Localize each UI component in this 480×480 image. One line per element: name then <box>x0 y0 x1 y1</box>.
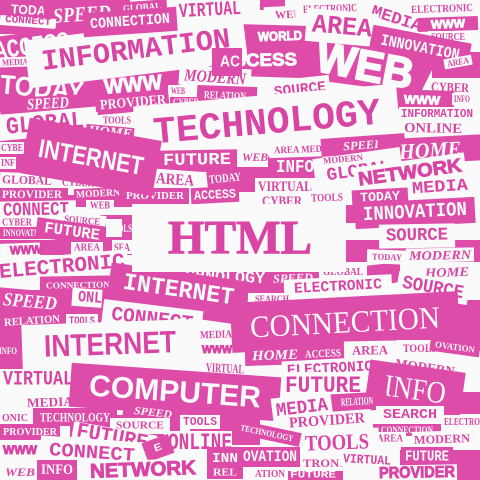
word tag: www right <box>418 16 478 32</box>
band: access and world <box>190 24 436 94</box>
word tag: connection large: CONNECTION <box>249 300 441 344</box>
word tag: future bottom: FUTURE <box>75 420 149 456</box>
word tag: tool lower: TOOLS <box>403 341 437 355</box>
word tag: inn bottom <box>207 447 243 479</box>
word tag: online <box>71 288 103 308</box>
word tag: innovation left <box>0 227 50 239</box>
word tag: web lower left: WEB <box>90 200 110 212</box>
word tag: www lower: WWW <box>202 344 233 356</box>
word tag: access middle: ACCESS <box>194 186 237 204</box>
word tag: connection top: CONNECTION <box>90 11 170 33</box>
word tag: electronic top: ELECTRONIC <box>303 2 357 16</box>
word tag: today large: TODAY <box>0 69 85 107</box>
word tag: technology: TECHNOLOGY <box>152 93 383 155</box>
word tag: info right: INFO <box>454 94 470 104</box>
word tag: ovation right: OVATION <box>434 339 476 355</box>
word tag: small pink slab: E <box>152 441 164 455</box>
word tag: media right <box>399 175 480 201</box>
word tag: web top: WEB <box>275 8 302 22</box>
word tag: global right middle: GLOBAL <box>325 158 392 186</box>
word tag: speed right middle <box>320 133 406 157</box>
word tag: ovation bottom: OVATION <box>243 448 297 466</box>
word tag: internet serif: INTERNET <box>121 270 236 312</box>
word tag: speed right middle: SPEED <box>343 137 384 153</box>
word tag: area media: AREA MEDIA <box>274 143 333 157</box>
word tag: technology left <box>33 408 117 426</box>
word tag: provider lower: PROVIDER <box>289 410 366 432</box>
word tag: connect middle: CONNECT <box>110 304 194 336</box>
word tag: speed left: SPEED <box>27 94 70 114</box>
word tag: connect bottom <box>39 435 149 471</box>
word tag: media right: MEDIA <box>411 177 469 199</box>
word tag: tools large: TOOLS <box>305 428 369 456</box>
word tag: innovation left: INNOVATION <box>3 228 47 238</box>
word tag: web small <box>168 85 188 97</box>
word tag: global top: GLOBAL <box>123 1 162 15</box>
word tag: virtual middle: VIRTUAL <box>258 179 312 195</box>
word tag: internet white: INTERNET <box>43 324 177 364</box>
word tag: future <box>155 149 239 173</box>
word tag: access right clip <box>212 48 242 76</box>
word tag: connection left: CONNECTION <box>46 279 111 291</box>
word tag: future left <box>35 217 109 247</box>
word tag: relation: RELATION <box>204 89 246 103</box>
word tag: connect middle <box>101 299 203 341</box>
word tag: connect left: CONNECT <box>3 198 69 222</box>
word tag: tools left <box>106 219 132 237</box>
word tag: electronic left: ELECTRONIC <box>0 251 126 285</box>
word tag: area left: AREA <box>74 242 101 254</box>
word tag: search lower <box>376 406 444 424</box>
word tag: area lower <box>344 341 396 359</box>
word tag: electronic top right <box>404 0 480 19</box>
word tag: connection large <box>230 291 460 353</box>
word tag: source lower left <box>57 212 107 230</box>
word tag: online right: ONLINE <box>404 121 462 137</box>
word tag: innovation on band <box>368 25 472 71</box>
word tag: today right lower: TODAY <box>372 251 403 263</box>
word tag: search lower: SEARCH <box>383 407 437 423</box>
word tag: speed: SPEED <box>52 0 112 28</box>
word tag: technology left: TECHNOLOGY <box>40 410 110 424</box>
word tag: provider left <box>0 424 60 440</box>
word tag: relation lower <box>327 391 387 413</box>
word tag: modern lower left: MODERN <box>76 187 121 201</box>
word tag: information right: INFORMATION <box>401 107 473 121</box>
word tag: info bottom: INFO <box>41 462 73 478</box>
word tag: www right lower: WWW <box>404 92 441 108</box>
word tag: relation <box>197 85 257 105</box>
word tag: search small: SEARCH <box>255 294 289 304</box>
word tag: home right <box>377 134 480 166</box>
word tag: computer <box>69 363 281 421</box>
word tag: web bottom left: WEB <box>5 465 35 479</box>
word tag: www right: WWW <box>431 16 466 32</box>
word tag: source right: SOURCE <box>386 225 448 247</box>
word tag: media top right <box>360 0 432 41</box>
word tag: innovation on band: INNOVATION <box>379 32 461 64</box>
word tag: innovation: INNOVATION <box>362 199 468 227</box>
word tag: access band text: ACCESS <box>219 49 297 71</box>
word tag: www bottom left: WWW <box>3 443 38 457</box>
word tag: world: WORLD <box>258 28 302 44</box>
word tag: electronic top <box>295 0 365 19</box>
word tag: area: AREA <box>311 9 374 45</box>
word tag: information <box>24 14 248 88</box>
word tag: search small <box>248 293 296 305</box>
word tag: online: ONL <box>77 288 103 308</box>
word tag: computer: COMPUTER <box>88 370 262 414</box>
word tag: technology bottom right: TECHNOLOGY <box>240 422 295 444</box>
word tag: speed right: SPEED <box>273 270 314 286</box>
word tag: www right lower <box>390 89 454 111</box>
word tag: cyber right: CYBER <box>431 79 470 95</box>
word tag: source lower left: SOURCE <box>64 214 101 228</box>
word tag: provider lower left: PROVIDER <box>2 187 62 201</box>
word tag: connect: CONNECT <box>5 15 51 29</box>
word tag: info pink: INFO <box>382 367 448 411</box>
word tag: cyber bottom left: CYBER <box>2 218 33 228</box>
word tag: network: NETWORK <box>357 155 463 191</box>
word tag: cyber lower left: CYBER <box>62 176 95 190</box>
word tag: web top <box>264 5 312 25</box>
band: right middle <box>110 262 400 300</box>
word tag: virtual left: VIRTUAL <box>3 368 73 392</box>
word tag: provider middle: PROVIDER <box>126 190 185 202</box>
word tag: ovation right <box>429 337 480 357</box>
word tag: area lower right <box>374 432 406 446</box>
word tag: web right middle: WEB <box>242 150 268 164</box>
word tag: info left: INF <box>1 157 15 169</box>
word tag: tools lower middle: TOOLS <box>183 415 217 429</box>
word tag: media: MEDIA <box>2 57 29 67</box>
word tag: electronic middle: ELECTRONIC <box>294 276 382 298</box>
word tag: source top <box>269 75 331 105</box>
word tag: search left: SEA <box>114 240 130 254</box>
word tag: connection top <box>82 7 178 37</box>
word tag: speed left <box>0 93 96 115</box>
word tag: modern lower right: MODERN <box>414 431 471 447</box>
word tag: future lower: FUTURE <box>285 373 361 399</box>
word tag: tools: TOOLS <box>103 116 131 126</box>
word tag: area right: AREA <box>446 55 470 69</box>
word tag: electronic lower: ELECTRONIC <box>287 358 373 380</box>
panel: html <box>132 204 346 272</box>
word tag: global right: GLOBAL <box>323 266 363 278</box>
word tag: future left: FUTURE <box>43 219 101 245</box>
word tag: internet serif <box>106 262 250 326</box>
word tag: tronic bottom: TRONIC <box>303 456 353 470</box>
word tag: virtual right lower <box>200 357 250 379</box>
word tag: home right: HOME <box>397 136 462 164</box>
word tag: tools lower left <box>66 314 98 330</box>
word tag: global right middle <box>312 147 404 189</box>
word tag: tools middle <box>309 189 345 207</box>
word tag: media lower right: MEDIA <box>275 394 330 422</box>
word tag: relation left: RELATION <box>4 313 60 329</box>
word tag: modern: MODERN <box>183 65 247 89</box>
word tag: www large: WWW <box>103 71 163 99</box>
word tag: today right lower <box>367 249 407 265</box>
word tag: cyber small: CYBER <box>173 97 199 107</box>
word tag: media left <box>0 390 96 414</box>
word tag: home: HOME <box>86 124 133 142</box>
word tag: tools left: TOOLS <box>108 221 132 235</box>
word tag: onic left <box>0 410 32 426</box>
word tag: ation bottom: ATION <box>255 468 285 480</box>
word tag: access lower: ACCESS <box>305 347 341 361</box>
word tag: source right: SOURCE <box>431 31 465 43</box>
word tag: today: TODAY <box>11 1 54 19</box>
word tag: connect bottom: CONNECT <box>48 439 136 467</box>
word tag: virtual right lower: VIRTUAL <box>206 360 245 376</box>
word tag: onic left: ONIC <box>2 412 28 424</box>
word tag: cyber left: CYBE <box>1 142 23 154</box>
word tag: today right <box>352 188 408 206</box>
word tag: global left: GLOBAL <box>5 108 85 142</box>
word tag: future bottom right: FUTURE <box>405 448 449 466</box>
word tag: relation lower: RELATION <box>341 395 373 409</box>
word tag: modern right middle: MODERN <box>323 152 364 166</box>
word tag: info pink <box>364 360 466 418</box>
word tag: future bottom middle <box>283 470 343 480</box>
word tag: provider: PROVIDER <box>99 93 167 113</box>
word tag: speed lower middle <box>122 403 184 423</box>
word tag: technology clipped: TECHNOLOGY <box>165 267 266 289</box>
word tag: modern lower: MODERN <box>394 355 456 379</box>
word tag: source middle lower: SOURCE <box>116 420 164 432</box>
word tag: small pink slab <box>141 434 175 462</box>
word tag: virtual bottom: VIRTUAL <box>343 451 392 469</box>
word tag: inn bottom: REL <box>213 468 237 478</box>
word tag: web large: WEB <box>312 33 418 99</box>
word tag: www left: WWW <box>10 242 43 258</box>
word tag: source right lower: SOURCE <box>401 272 465 304</box>
word tag: cyber middle: CYBER <box>262 194 303 210</box>
word tag: source middle lower <box>110 418 170 434</box>
word tag: media left: MEDIA <box>27 394 74 410</box>
word tag: home lower: HOME <box>251 348 298 364</box>
word tag: source top: SOURCE <box>273 79 327 101</box>
word tag: home right lower: HOME <box>424 264 470 280</box>
word tag: today right: TODAY <box>360 188 401 206</box>
word tag: access lower <box>301 345 345 363</box>
word tag: info middle <box>268 156 322 180</box>
word tag: web bottom left <box>0 464 40 480</box>
word tag: modern right lower: MODERN <box>408 247 472 263</box>
word tag: access right clip: AC <box>220 54 240 70</box>
word tag: future: FUTURE <box>163 151 231 171</box>
word tag: area lower: AREA <box>352 342 389 358</box>
word tag: today middle: TODAY <box>208 169 242 187</box>
word tag: online bottom: ONLINE <box>168 430 232 456</box>
word tag: information: INFORMATION <box>40 23 232 79</box>
word tag: internet pink: INTERNET <box>36 133 146 181</box>
word tag: connection left <box>40 275 116 295</box>
word tag: technology <box>133 84 401 164</box>
word tag: speed lower middle: SPEED <box>133 405 173 421</box>
word tag: www bottom left <box>0 440 40 458</box>
word tag: internet pink <box>20 118 162 196</box>
word tag: media lower <box>198 325 234 345</box>
word tag: global lower left: GLOBAL <box>2 172 52 188</box>
word tag: web right middle <box>237 147 273 167</box>
word tag: today middle <box>206 167 244 189</box>
title: html: HTML <box>168 212 312 264</box>
word tag: connection lower: CONNECTION <box>381 425 433 435</box>
word tag: provider left: PROVIDER <box>3 426 58 438</box>
word tag: today <box>0 0 66 22</box>
word tag: web small: WEB <box>171 86 185 96</box>
word tag: www large <box>90 67 182 103</box>
word tag: area middle: AREA <box>155 170 195 190</box>
word tag: tools lower left: TOOLS <box>69 316 95 328</box>
word tag: media top right: MEDIA <box>368 3 424 37</box>
word tag: speed lower: SPEED <box>2 289 58 315</box>
word tag: tools middle: TOOLS <box>311 191 343 205</box>
word tag: info middle: INFO <box>276 158 314 178</box>
word tag: provider middle <box>121 188 189 204</box>
word tag: area lower right: AREA <box>377 434 404 444</box>
word tag: media lower: MEDIA <box>200 328 232 342</box>
word tag: inn bottom: INN <box>212 451 238 467</box>
word tag: home lower <box>245 346 305 366</box>
word tag: info bottom <box>37 460 77 480</box>
word tag: info right <box>452 93 472 105</box>
